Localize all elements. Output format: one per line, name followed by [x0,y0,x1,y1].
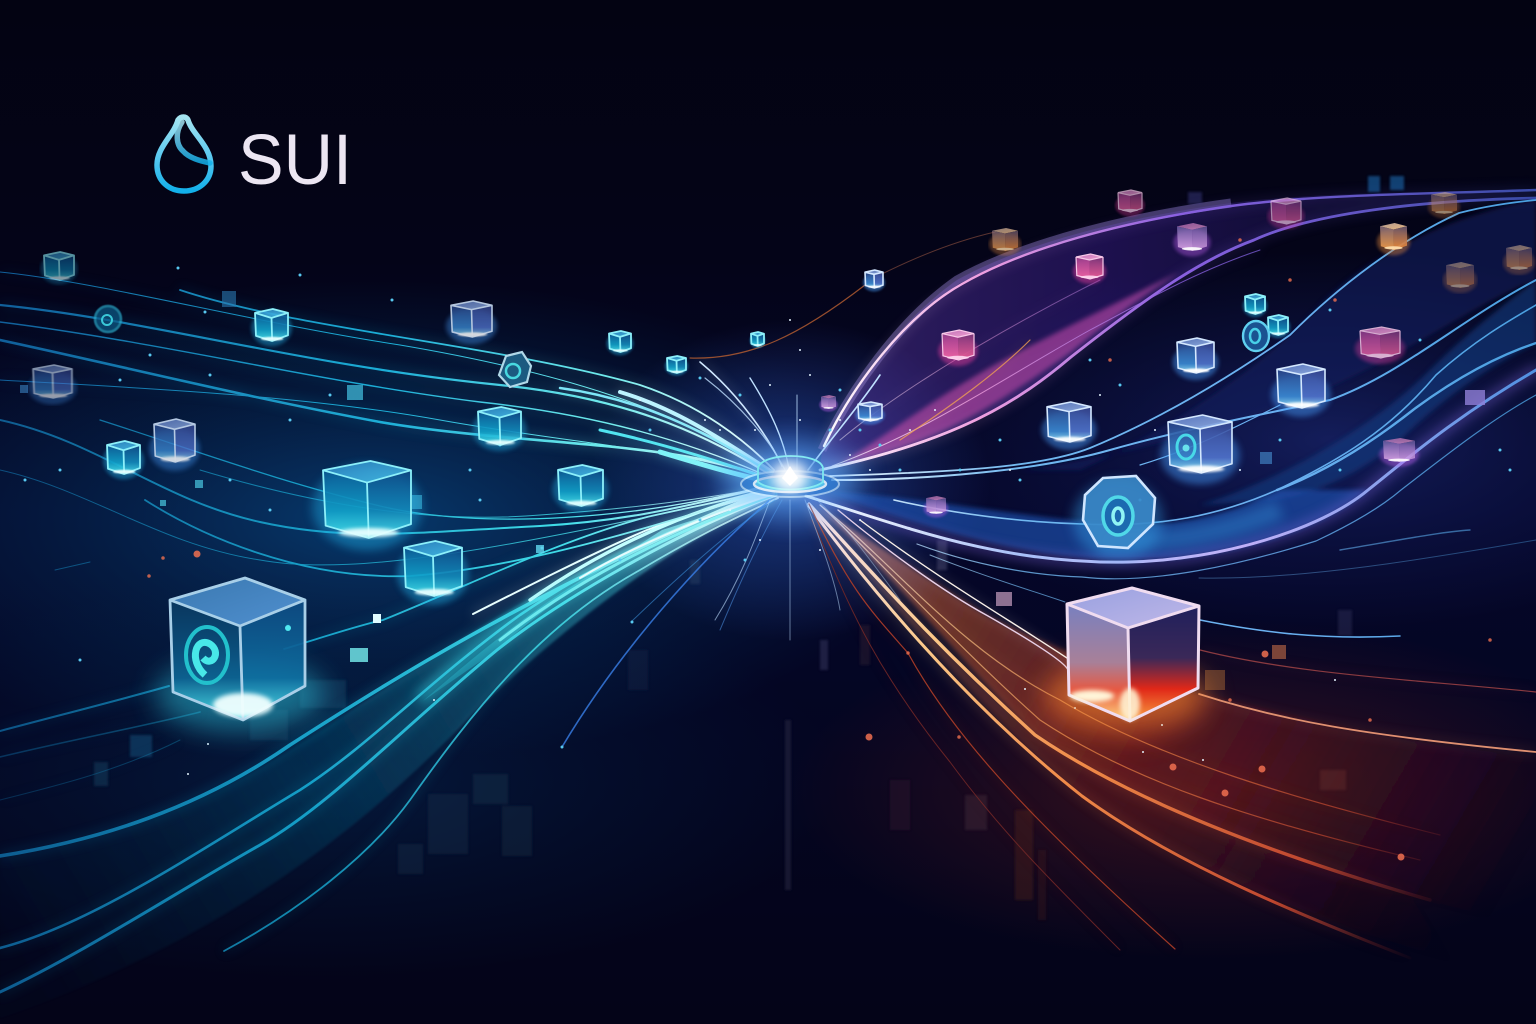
radial sparks around the hub [705,375,900,640]
cube: largest with logo [155,578,325,731]
SUI logo [157,117,352,200]
light stream: left upper bundle [0,272,782,482]
cube: blue with logo [1160,415,1240,485]
cube: small blue pair b [1266,315,1290,338]
cube: pink red [938,330,978,366]
light stream: orange glow below the cube [1040,660,1200,740]
light stream: belly edge [806,370,1536,562]
cube: lilac [1173,223,1211,257]
cube: magenta [1267,198,1305,229]
light stream: left lower ribbons [0,490,776,1018]
token: small ring [95,306,121,332]
cube: pink [1073,254,1106,284]
cube: medium cyan [397,541,469,605]
cube: pink distant [1115,190,1145,216]
cube: large orange glass [1048,588,1208,725]
cube: tiny pink near hub [819,395,838,412]
cube: blue edge [28,365,77,405]
cube: cyan upper [251,309,292,346]
light stream: right purple leaf [820,190,1536,470]
cube: cyan small [103,441,144,479]
cube: pink right [1355,327,1405,364]
central hub [720,446,860,514]
light stream: thin amber thread to the far cubes [690,232,995,358]
small squares [20,176,1485,690]
cube: orange pale [989,228,1021,256]
cube: small centre left 2 [665,356,688,376]
particles: warm [149,240,1490,857]
cube: small centre left [606,331,634,355]
reflection: blurred squares and vertical streaks below the hub [94,540,1352,920]
light stream: right blue ribbons [820,200,1536,560]
particles: blue [25,268,1510,747]
light stream: thin blue sparks below hub [562,500,782,747]
cube: small blue near hub [855,402,885,425]
cube: pale blue centre [1042,402,1096,450]
cube: pink hub side [924,496,948,518]
cube: tiny centre [749,332,766,348]
cubes: left stream [28,252,766,731]
light stream: right lower orange ribbons [809,504,1536,960]
light stream: left middle band [0,420,772,576]
cube: pink small [1379,438,1419,467]
cube: small blue [863,270,885,292]
cube: orange [1377,223,1410,255]
cube: pale blue right [1271,364,1331,417]
cube: pale right [1443,262,1477,293]
light stream: right purple lines [820,190,1536,470]
token: hex nut [499,352,531,387]
cube: pale blue [1173,338,1218,380]
cube: small blue pair a [1243,294,1267,317]
light stream: right blue lines [830,200,1536,637]
icon: water drop [157,117,211,191]
cube: pale edge [1503,245,1535,275]
wordmark: SUI [238,121,352,200]
cubes: right stream [819,190,1535,725]
token: small hex nut [1243,321,1269,351]
cube: pale tilted [149,419,200,471]
cube: distant blue [40,252,78,284]
light stream: right lower orange lines [809,504,1536,958]
token: large hex nut [1073,476,1163,560]
cube: pale upper [446,301,497,344]
light stream: blue glow under the hex token [1100,510,1280,541]
cube: large cyan [312,461,422,550]
cube: cyan middle [473,407,526,451]
light stream: left lower fan lines [0,488,778,992]
cube: orange distant [1428,192,1460,218]
cube: cyan near hub [553,465,608,513]
particles: white [188,320,1335,774]
